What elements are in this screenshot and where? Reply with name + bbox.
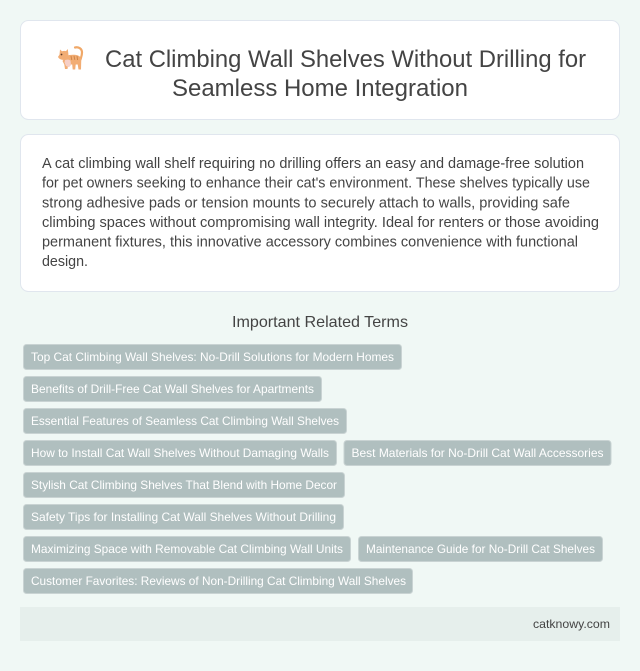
footer: catknowy.com [533, 617, 610, 631]
tag: Best Materials for No-Drill Cat Wall Accessories [352, 446, 604, 460]
title: Cat Climbing Wall Shelves Without Drilling for [105, 46, 586, 73]
text block: description: A cat climbing wall shelf requiring no drilling offers an easy and damage-free solution [42, 156, 584, 172]
heading: related terms: Important Related Terms [232, 314, 408, 331]
tag [24, 472, 344, 498]
tag [24, 344, 402, 370]
tag: Stylish Cat Climbing Shelves That Blend with Home Decor [31, 478, 337, 492]
tag: Essential Features of Seamless Cat Climbing Wall Shelves [31, 414, 339, 428]
text block: description: climbing spaces without compromising wall integrity. Ideal for renters or those avoiding [42, 215, 599, 231]
panel: related term tags [24, 344, 611, 594]
tag [24, 376, 322, 402]
tag [344, 440, 611, 466]
footer [20, 607, 620, 641]
title: Seamless Home Integration [172, 75, 468, 102]
text block: description: for pet owners seeking to enhance their cat's environment. These shelves typically use [42, 176, 590, 192]
tag: Customer Favorites: Reviews of Non-Drilling Cat Climbing Wall Shelves [31, 574, 406, 588]
title [105, 46, 586, 102]
text block: description [42, 156, 599, 270]
text block: description: permanent fixtures, this innovative accessory combines convenience with functional [42, 235, 578, 251]
panel: title card [20, 20, 620, 120]
text block: description: strong adhesive pads or tension mounts to securely attach to walls, providing safe [42, 195, 570, 211]
text block: description: design. [42, 254, 88, 270]
tag: Benefits of Drill-Free Cat Wall Shelves for Apartments [31, 382, 314, 396]
tag: Top Cat Climbing Wall Shelves: No-Drill Solutions for Modern Homes [31, 350, 394, 364]
tag [24, 504, 344, 530]
tag [24, 536, 350, 562]
tag [24, 568, 412, 594]
tag: How to Install Cat Wall Shelves Without Damaging Walls [31, 446, 329, 460]
tag [358, 536, 602, 562]
icon: cat [58, 47, 82, 70]
panel: description card [20, 134, 620, 292]
tag: Maximizing Space with Removable Cat Climbing Wall Units [31, 542, 343, 556]
tag [24, 440, 336, 466]
tag [24, 408, 346, 434]
tag: Maintenance Guide for No-Drill Cat Shelves [366, 542, 595, 556]
tag: Safety Tips for Installing Cat Wall Shelves Without Drilling [31, 510, 336, 524]
